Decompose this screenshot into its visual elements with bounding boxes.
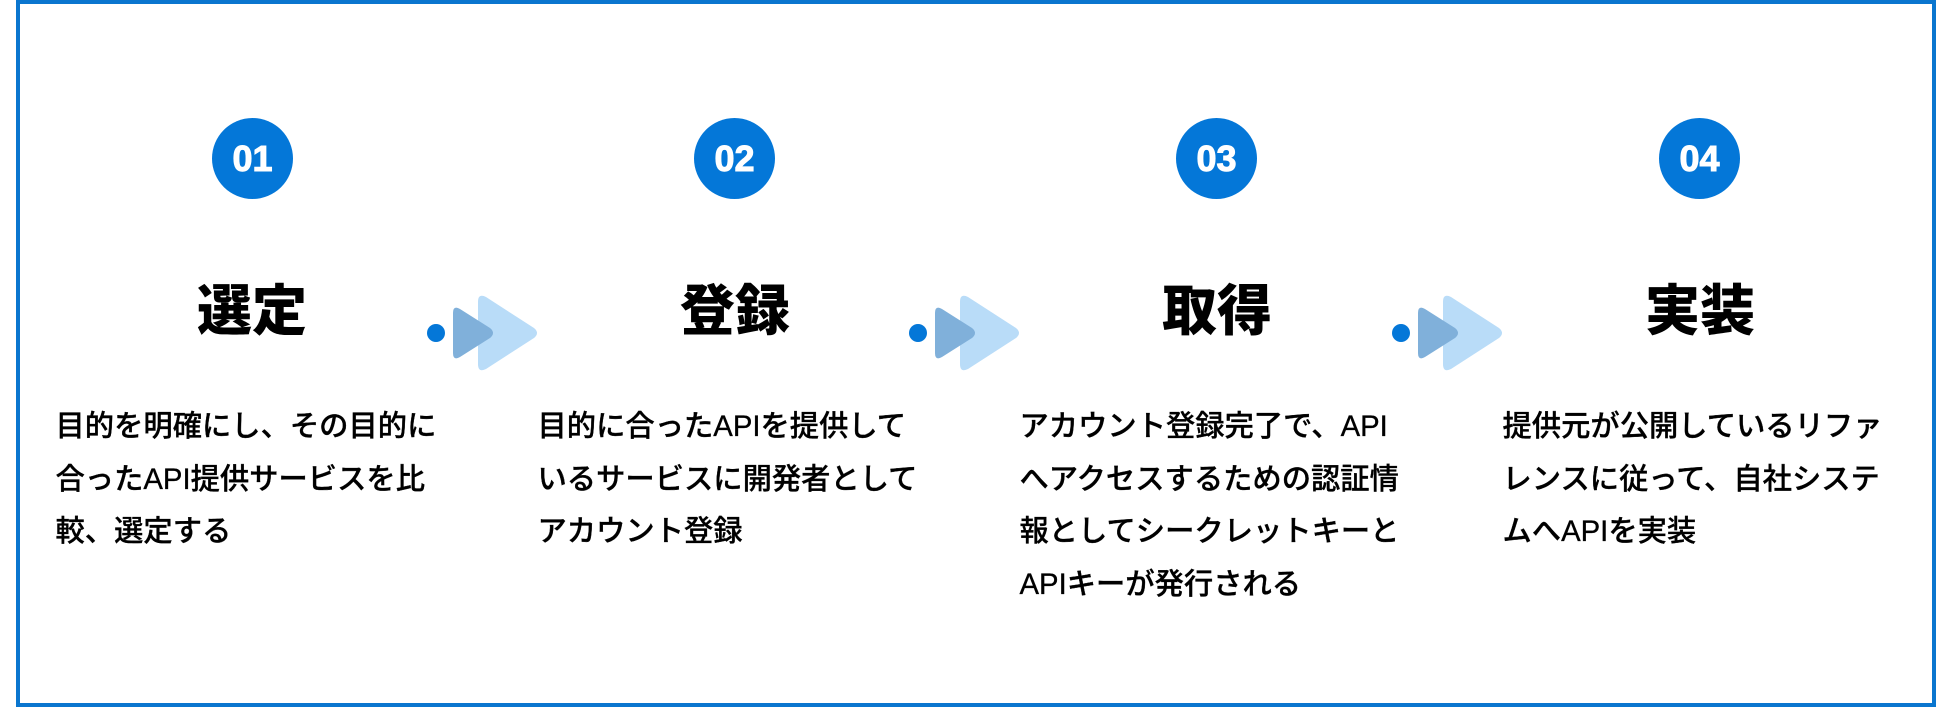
step 2 title: 登録 xyxy=(680,266,790,346)
arrow 3 xyxy=(1392,296,1502,370)
step 3 description xyxy=(1019,410,1399,600)
step 2 description xyxy=(538,410,917,548)
step 3 number badge xyxy=(1176,118,1257,199)
step 4 description: レンスに従って、自社システ xyxy=(1502,462,1880,496)
step 1 number badge xyxy=(212,118,293,199)
step 1 title: 選定 xyxy=(197,266,307,346)
step 4 description xyxy=(1502,410,1882,548)
step 1 description xyxy=(56,410,436,548)
arrow 2 xyxy=(909,296,1019,370)
step 4 description: 提供元が公開しているリファ xyxy=(1502,410,1882,443)
step 1 number badge: 01 xyxy=(232,138,273,179)
step 3 description: アカウント登録完了で、API xyxy=(1020,410,1388,443)
step 4 number badge: 04 xyxy=(1679,138,1720,179)
step 3 description: APIキーが発行される xyxy=(1020,568,1301,600)
step 1 description: 合ったAPI提供サービスを比 xyxy=(56,462,425,496)
arrow 1 xyxy=(427,296,537,370)
step 1 description: 目的を明確にし、その目的に xyxy=(56,410,436,443)
step 4 title: 実装 xyxy=(1645,266,1755,346)
step 2 description: アカウント登録 xyxy=(538,515,743,548)
step 3 description: へアクセスするための認証情 xyxy=(1020,462,1399,496)
step 2 description: 目的に合ったAPIを提供して xyxy=(538,410,906,443)
step 2 number badge xyxy=(694,118,775,199)
step 1 description: 較、選定する xyxy=(56,515,231,548)
step 4 description: ムへAPIを実装 xyxy=(1502,515,1696,548)
step 2 description: いるサービスに開発者として xyxy=(538,462,917,496)
step 3 description: 報としてシークレットキーと xyxy=(1020,515,1399,548)
step 4 number badge xyxy=(1659,118,1740,199)
step 3 number badge: 03 xyxy=(1196,138,1237,179)
step 3 title: 取得 xyxy=(1162,266,1272,346)
step 2 number badge: 02 xyxy=(714,138,755,179)
